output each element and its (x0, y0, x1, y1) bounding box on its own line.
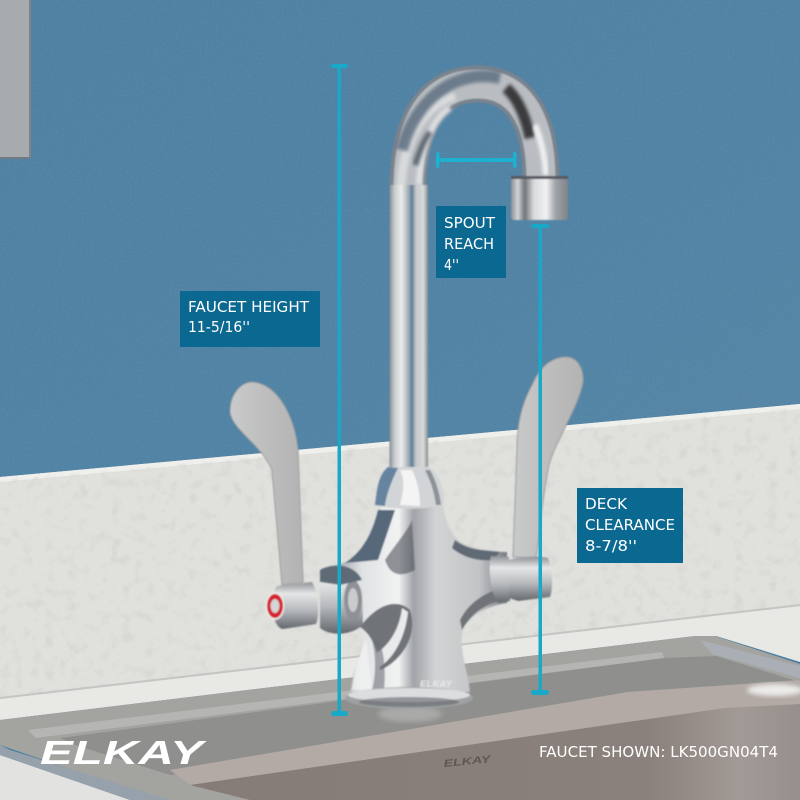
sink deck (0, 636, 800, 800)
caption: faucet shown: FAUCET SHOWN: LK500GN04T4 (539, 743, 778, 761)
basin logo: ELKAY (443, 754, 493, 770)
faucet (230, 76, 583, 722)
sink basin (190, 704, 800, 800)
left handle blade (230, 382, 303, 585)
wall texture (0, 0, 800, 480)
spout (390, 76, 546, 475)
label: spout reach: SPOUT (444, 214, 496, 232)
label: spout reach (436, 206, 506, 278)
base flange (345, 687, 473, 709)
label: faucet height (180, 291, 320, 347)
label: faucet height: 11-5/16'' (188, 318, 250, 336)
aerator (511, 176, 568, 220)
label: deck clearance: CLEARANCE (585, 516, 675, 534)
label: spout reach: 4'' (444, 256, 459, 274)
left valve nut (320, 566, 363, 634)
right handle blade (513, 357, 583, 558)
body reflections (345, 510, 505, 690)
red hot indicator (266, 592, 284, 620)
dimension: deck clearance (531, 224, 549, 695)
faucet body (320, 505, 507, 692)
label: deck clearance (577, 488, 683, 563)
base logo: ELKAY (420, 679, 453, 689)
right valve nut (490, 556, 510, 603)
wall plate (0, 0, 31, 159)
sink front rim (170, 680, 800, 785)
countertop strip (0, 606, 800, 720)
left handle hub (272, 582, 318, 629)
faucet flange reflection (378, 706, 442, 722)
logo: Elkay: ELKAY (40, 734, 207, 771)
rim highlight (747, 684, 800, 696)
label: faucet height: FAUCET HEIGHT (188, 298, 310, 316)
blue wall (0, 0, 800, 500)
lower left countertop (0, 755, 130, 800)
backsplash (0, 400, 800, 710)
collar (375, 467, 444, 509)
label: spout reach: REACH (444, 235, 494, 253)
right handle hub (509, 557, 552, 601)
label: deck clearance: DECK (585, 495, 628, 513)
dimension: faucet height (331, 64, 348, 716)
dimension: spout reach (436, 152, 516, 168)
label: deck clearance: 8-7/8'' (585, 537, 637, 555)
